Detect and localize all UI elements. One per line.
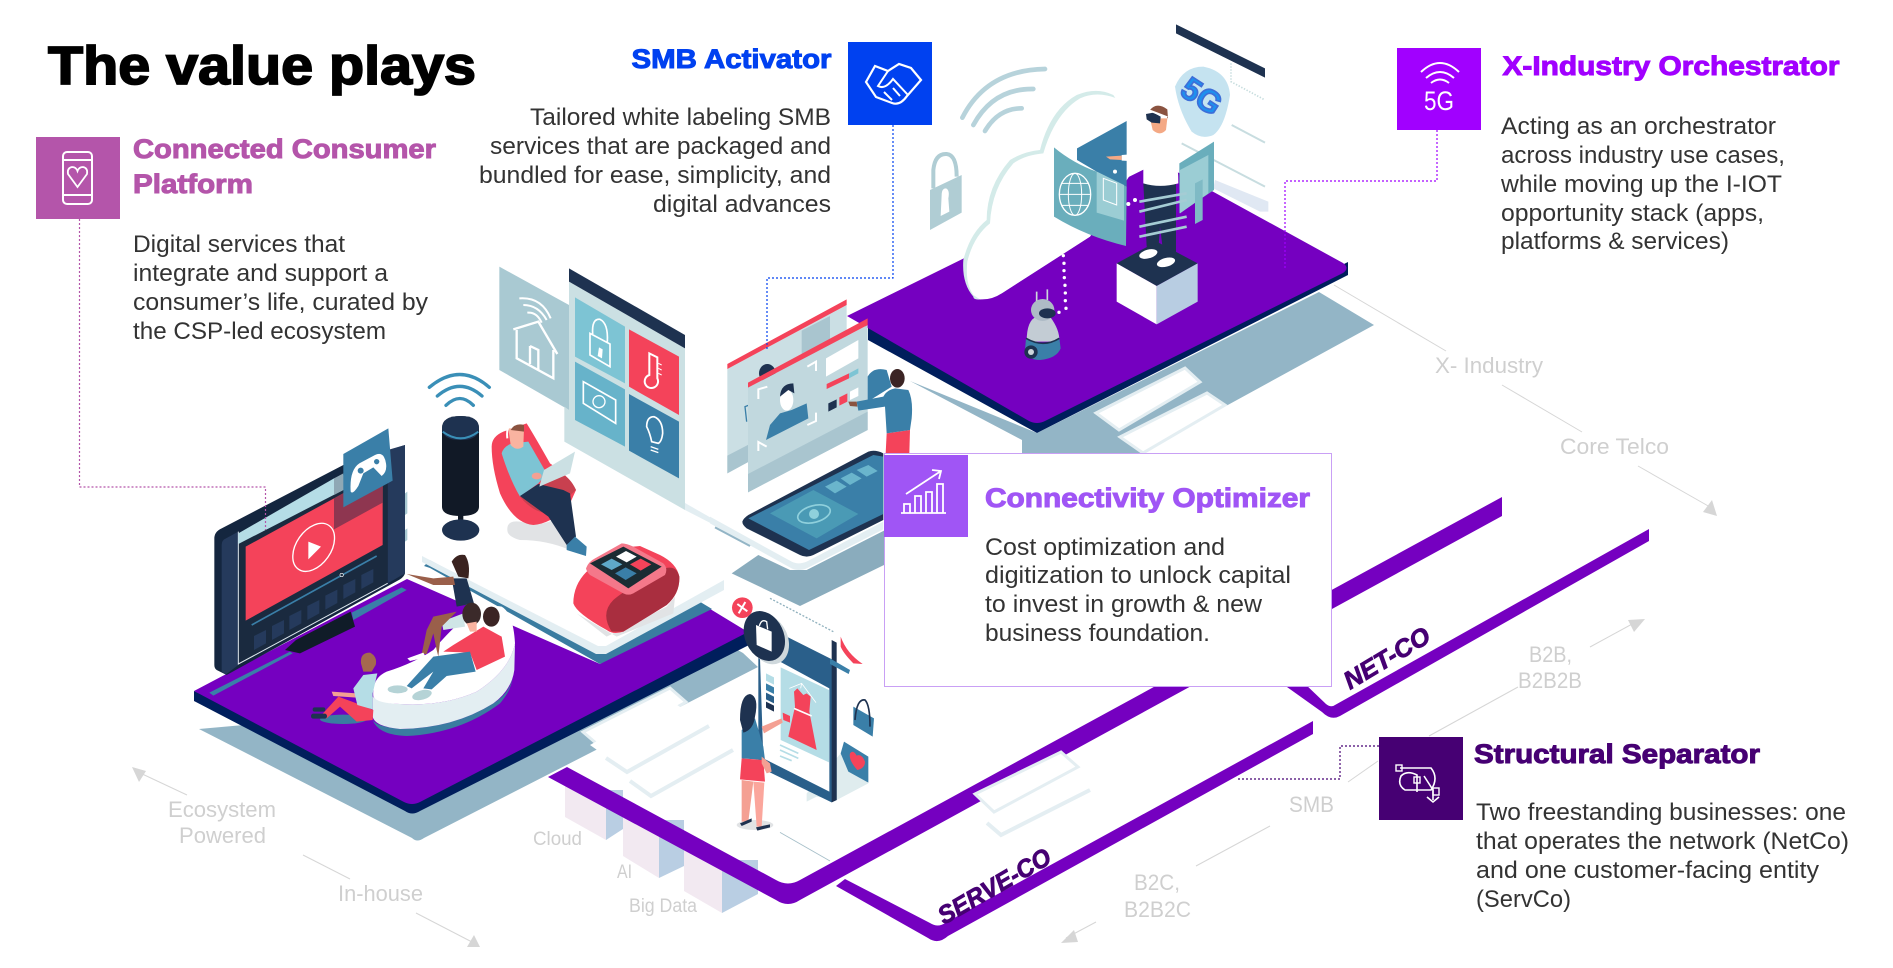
living room group xyxy=(209,428,515,736)
body text: consumer’s life, curated by xyxy=(133,289,428,316)
upper platform (X-Industry) xyxy=(847,162,1348,433)
person on red chair with laptop xyxy=(492,423,587,556)
axis: Ecosystem Powered to In-house xyxy=(132,767,480,947)
data stack labels: Cloud xyxy=(533,829,582,850)
wifi signal arcs xyxy=(962,69,1045,131)
woman pointing at TV xyxy=(407,555,474,661)
axis: Ecosystem Powered to In-house: Powered xyxy=(179,823,266,848)
body text: digitization to unlock capital xyxy=(985,562,1291,589)
icon: shopping bag badge xyxy=(732,597,797,671)
body text: Acting as an orchestrator xyxy=(1501,113,1776,140)
smart home group xyxy=(429,267,685,637)
heading: X-Industry Orchestrator xyxy=(1502,51,1840,81)
heading: Connectivity Optimizer xyxy=(985,483,1311,513)
panel: Structural Separator xyxy=(1379,737,1849,913)
panel: Connected Consumer Platform xyxy=(36,134,437,345)
heading: Connected Consumer xyxy=(133,134,437,164)
left platform (Connected Consumer) xyxy=(194,579,751,814)
panel: SMB Activator xyxy=(479,42,932,218)
icon: red shoe xyxy=(841,637,863,664)
body text: to invest in growth & new xyxy=(985,591,1263,618)
axis: X-Industry to Core Telco: X- Industry xyxy=(1435,353,1543,378)
Net-Co label: NET-CO xyxy=(1339,621,1436,695)
connector: SMB Activator xyxy=(767,125,893,350)
data stack labels: Big Data xyxy=(629,896,697,917)
man pointing at screens xyxy=(848,369,912,453)
body text: while moving up the I-IOT xyxy=(1500,171,1782,198)
body text: Cost optimization and xyxy=(985,534,1225,561)
business screens group xyxy=(710,299,912,606)
icon: 5G wifi: 5G xyxy=(1424,86,1454,116)
body text: bundled for ease, simplicity, and xyxy=(479,162,831,189)
panel: Connectivity Optimizer xyxy=(884,454,1332,686)
body text xyxy=(479,104,831,218)
body text: integrate and support a xyxy=(133,260,389,287)
body text: business foundation. xyxy=(985,620,1210,647)
Serve-Co frame strip xyxy=(836,721,1313,941)
icon: growth chart xyxy=(884,455,968,537)
axis: Ecosystem Powered to In-house: In-house xyxy=(338,881,423,906)
icon: phone with heart xyxy=(36,137,120,219)
icon: handbag xyxy=(853,700,874,737)
holographic panels with VR user xyxy=(1054,106,1214,253)
white tiles on Serve-Co platform xyxy=(583,688,1090,835)
axis: B2B to B2C: SMB xyxy=(1289,792,1334,817)
Net-Co frame strip xyxy=(1266,529,1649,718)
beanbag xyxy=(373,606,515,736)
central white plate xyxy=(422,440,724,664)
body text: and one customer-facing entity xyxy=(1476,857,1819,884)
heading xyxy=(133,134,437,199)
heading: Platform xyxy=(133,169,253,199)
axis: B2B to B2C: B2B2B xyxy=(1518,668,1582,693)
body text: across industry use cases, xyxy=(1501,142,1785,169)
body text xyxy=(1476,799,1849,913)
smart home house panel xyxy=(499,267,569,410)
body text: Two freestanding businesses: one xyxy=(1476,799,1846,826)
icon: separating flow xyxy=(1379,737,1463,820)
front screen xyxy=(748,318,868,492)
left platform shadow xyxy=(199,640,758,840)
axis: X-Industry to Core Telco: Core Telco xyxy=(1560,434,1669,459)
heading: Structural Separator xyxy=(1474,739,1761,769)
body text: services that are packaged and xyxy=(490,133,831,160)
icon: game controller panel xyxy=(343,428,393,507)
body text: digital advances xyxy=(653,191,831,218)
Serve-Co data stacks xyxy=(565,770,758,913)
white tiles beneath upper platform xyxy=(1096,368,1225,453)
robot xyxy=(1024,254,1068,360)
body text xyxy=(1500,113,1785,255)
boy seated on floor xyxy=(311,653,377,724)
shopper woman xyxy=(737,694,790,831)
Serve-Co platform strip xyxy=(548,497,1502,904)
axis: Ecosystem Powered to In-house: Ecosystem xyxy=(168,797,276,822)
back screen xyxy=(727,299,847,473)
icon: handshake xyxy=(848,42,932,125)
connector: X-Industry Orchestrator xyxy=(1285,130,1437,268)
smartwatch xyxy=(573,543,679,637)
body text xyxy=(133,231,428,345)
axis: B2B to B2C: B2B2C xyxy=(1124,897,1191,922)
title: The value plays xyxy=(48,36,476,96)
body text: (ServCo) xyxy=(1476,886,1571,913)
shopping phone illustration xyxy=(732,597,874,861)
body text xyxy=(985,534,1291,647)
connector: Structural Separator xyxy=(1236,746,1379,779)
panel: X-Industry Orchestrator xyxy=(1397,48,1840,255)
VR user xyxy=(1106,106,1187,253)
body text: that operates the network (NetCo) xyxy=(1476,828,1849,855)
axis: B2B to B2C: B2B, xyxy=(1529,642,1572,667)
heading: SMB Activator xyxy=(632,44,832,74)
smart speaker with wifi xyxy=(429,374,489,541)
couple on beanbag xyxy=(388,603,505,702)
axis: B2B to B2C xyxy=(1061,619,1645,943)
5G hologram bubble: 5G xyxy=(1175,70,1229,123)
X-Industry illustration group xyxy=(930,24,1268,360)
body text: the CSP-led ecosystem xyxy=(133,318,386,345)
data stack labels: AI xyxy=(617,862,632,883)
body text: opportunity stack (apps, xyxy=(1501,200,1764,227)
smart home tile panel xyxy=(564,268,685,510)
body text: Digital services that xyxy=(133,231,345,258)
icon: 5G wifi xyxy=(1397,48,1481,130)
smart TV xyxy=(209,445,407,696)
phone shadow and base xyxy=(710,517,884,606)
smartphone xyxy=(742,451,883,557)
pedestal cube xyxy=(1117,242,1198,324)
connector: Connected Consumer Platform xyxy=(80,219,266,530)
upper platform shadow xyxy=(910,292,1374,453)
axis: B2B to B2C: B2C, xyxy=(1134,870,1180,895)
icon: heart bubble xyxy=(841,742,868,783)
body text: platforms & services) xyxy=(1501,228,1729,255)
back panel upper right xyxy=(1176,24,1268,212)
body text: Tailored white labeling SMB xyxy=(530,104,831,131)
data stack labels xyxy=(533,829,697,917)
Serve-Co label: SERVE-CO xyxy=(933,843,1057,930)
cloud xyxy=(963,91,1133,299)
axis: X-Industry to Core Telco xyxy=(1334,285,1717,516)
icon: cloud padlock xyxy=(930,154,962,230)
